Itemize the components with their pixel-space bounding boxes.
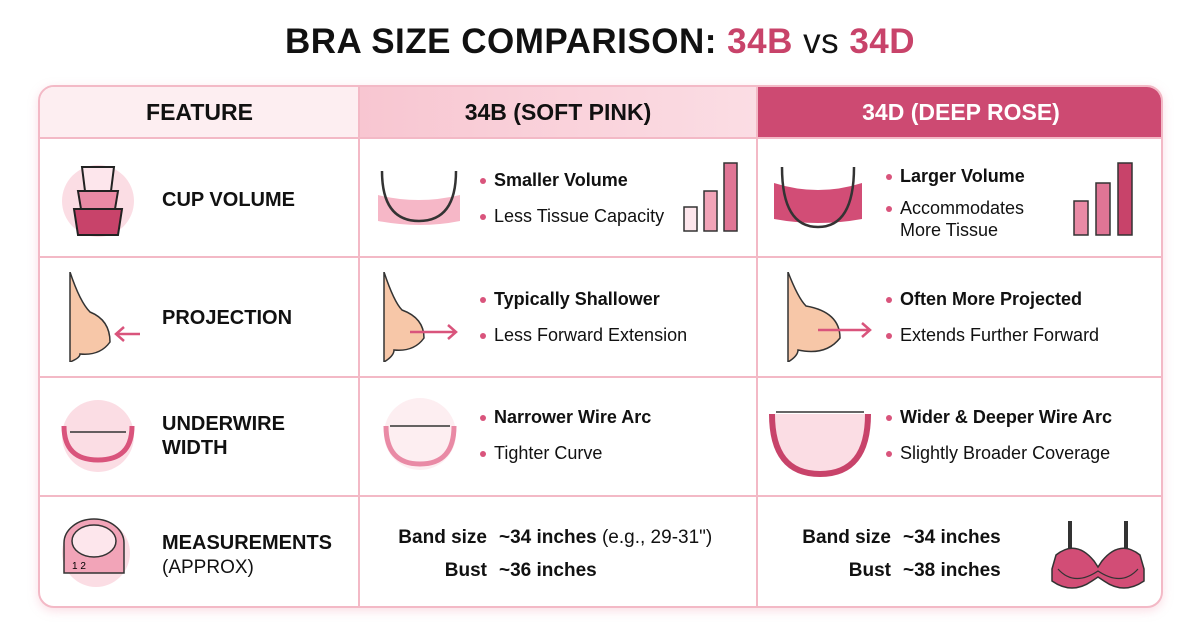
label bbox=[162, 413, 285, 459]
icon: tape measure bbox=[62, 518, 130, 587]
header: 34D: 34D (DEEP ROSE) bbox=[862, 98, 1060, 124]
title: BRA SIZE COMPARISON: 34B vs 34D bbox=[285, 22, 915, 61]
label: (APPROX) bbox=[162, 557, 254, 578]
header: 34D bbox=[757, 87, 1165, 139]
icon: 34B profile bbox=[383, 272, 458, 362]
text 34B: Tighter Curve bbox=[494, 443, 602, 463]
row: projection bbox=[69, 272, 1099, 362]
icon: small cup bbox=[378, 171, 460, 225]
icon: stacked cups bbox=[62, 165, 134, 237]
text 34D: Larger Volume bbox=[900, 166, 1025, 186]
row: measurements: ~38 inches bbox=[903, 560, 1001, 581]
text 34B bbox=[480, 289, 687, 345]
label bbox=[162, 532, 332, 578]
text 34B: Less Tissue Capacity bbox=[494, 206, 664, 226]
text 34D: Extends Further Forward bbox=[900, 325, 1099, 345]
text 34D bbox=[886, 289, 1099, 345]
text 34D: Often More Projected bbox=[900, 289, 1082, 309]
text 34D bbox=[886, 166, 1025, 240]
label: UNDERWIRE bbox=[162, 413, 285, 435]
bars 34B bbox=[683, 162, 738, 232]
icon: wide wire bbox=[769, 411, 871, 477]
text 34D: Wider & Deeper Wire Arc bbox=[900, 407, 1112, 427]
icon: profile bbox=[69, 272, 140, 362]
comparison table bbox=[38, 85, 1163, 608]
row: measurements: ~36 inches bbox=[499, 560, 597, 581]
label: MEASUREMENTS bbox=[162, 532, 332, 554]
row: cup volume bbox=[62, 162, 1133, 240]
row: measurements bbox=[62, 518, 1145, 589]
icon: large cup bbox=[774, 167, 862, 228]
label: CUP VOLUME bbox=[162, 189, 295, 211]
text 34D: Accommodates bbox=[900, 198, 1024, 218]
text 34B: Less Forward Extension bbox=[494, 325, 687, 345]
bars 34D bbox=[1073, 162, 1133, 236]
header: 34B bbox=[359, 87, 757, 139]
text 34D: More Tissue bbox=[900, 220, 998, 240]
text 34D: Slightly Broader Coverage bbox=[900, 443, 1110, 463]
label: PROJECTION bbox=[162, 307, 292, 329]
label: WIDTH bbox=[162, 437, 228, 459]
header: 34B: 34B (SOFT PINK) bbox=[465, 98, 651, 124]
icon: wire bbox=[62, 400, 134, 472]
icon: narrow wire bbox=[384, 398, 456, 470]
text 34B: Band size bbox=[398, 527, 487, 548]
text 34D: Band size bbox=[802, 527, 891, 548]
text 34B: Narrower Wire Arc bbox=[494, 407, 651, 427]
text 34B: Bust bbox=[445, 560, 487, 581]
text 34B: Smaller Volume bbox=[494, 170, 628, 190]
row: underwire bbox=[62, 398, 1112, 477]
icon: bra bbox=[1051, 521, 1145, 589]
text 34D bbox=[802, 527, 891, 581]
header: feature bbox=[40, 87, 359, 139]
icon: tape measure: 1 2 bbox=[72, 561, 86, 572]
text 34B bbox=[398, 527, 487, 581]
text 34B bbox=[480, 407, 651, 463]
text 34D: Bust bbox=[849, 560, 891, 581]
header: feature: FEATURE bbox=[146, 98, 253, 124]
icon: 34D profile bbox=[787, 272, 872, 362]
text 34D bbox=[886, 407, 1112, 463]
row: measurements: ~34 inches bbox=[903, 527, 1001, 548]
text 34B bbox=[480, 170, 664, 226]
text 34B: Typically Shallower bbox=[494, 289, 660, 309]
row: measurements: ~34 inches (e.g., 29-31") bbox=[499, 527, 712, 548]
